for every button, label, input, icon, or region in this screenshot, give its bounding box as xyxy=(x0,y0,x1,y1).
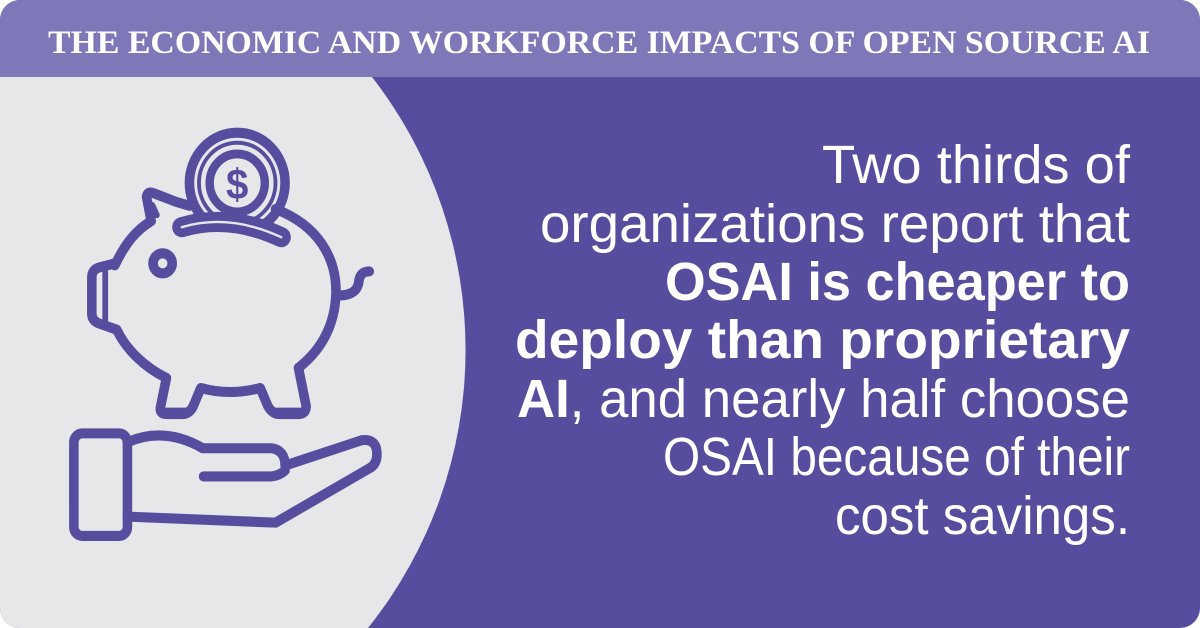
statement text: OSAI is cheaper to xyxy=(665,252,1130,312)
pig body xyxy=(92,192,369,414)
hand xyxy=(74,433,377,536)
coin: $ xyxy=(226,161,248,208)
statement text: cost savings. xyxy=(835,486,1130,546)
statement text: Two thirds of xyxy=(822,135,1131,195)
statement text: deploy than proprietary xyxy=(515,310,1130,370)
statement text xyxy=(515,135,1131,546)
statement text: AI, and nearly half choose xyxy=(517,369,1130,429)
header title: THE ECONOMIC AND WORKFORCE IMPACTS OF OPEN SOURCE AI xyxy=(48,25,1150,61)
gray left panel with arc xyxy=(0,77,466,628)
statement text: OSAI because of their xyxy=(663,427,1130,487)
coin xyxy=(189,133,285,233)
icon: piggy bank on hand xyxy=(69,128,382,541)
header bar xyxy=(0,0,1200,77)
statement text: organizations report that xyxy=(540,194,1130,254)
